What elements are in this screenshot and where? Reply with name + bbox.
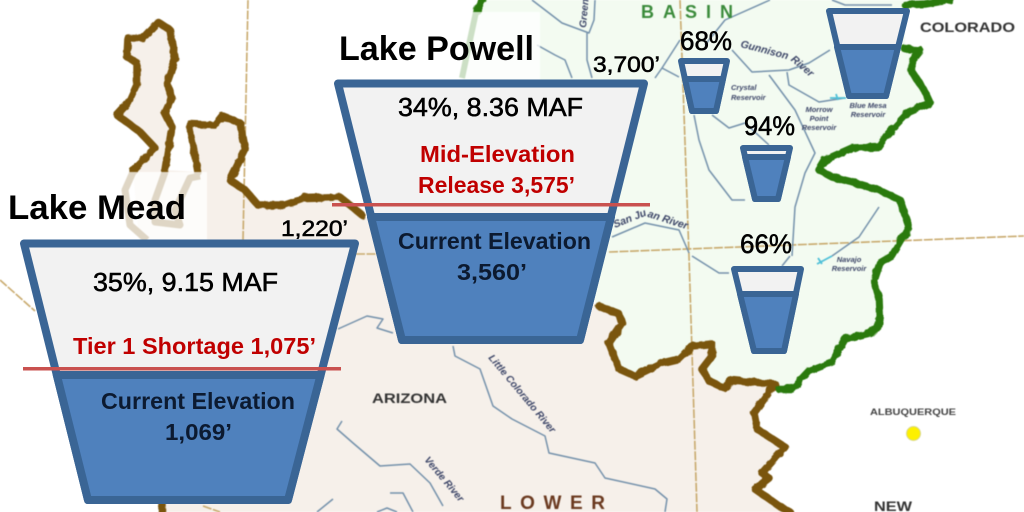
map label: COLORADO: COLORADO — [920, 19, 1015, 35]
green upper basin boundary — [476, 0, 949, 389]
current elevation value: 1,069’ — [165, 419, 232, 445]
shortage threshold label: Tier 1 Shortage 1,075’ — [73, 333, 316, 359]
cup body — [338, 84, 644, 340]
Lake Mead cup diagram — [23, 244, 355, 500]
river and reservoir labels: Reservoir — [851, 110, 886, 119]
river and reservoir labels: Point — [810, 114, 829, 123]
river and reservoir labels: Little Colorado River — [486, 353, 558, 436]
Crystal Reservoir percentage: 68% — [680, 26, 732, 56]
Crystal Reservoir cup — [681, 61, 727, 111]
water level — [371, 217, 611, 340]
Morrow Point Reservoir cup — [743, 148, 790, 199]
Lake Powell title: Lake Powell — [339, 30, 534, 68]
river and reservoir labels: San Juan River — [614, 210, 689, 229]
current elevation label: Current Elevation — [101, 388, 295, 414]
map label: BASIN: BASIN — [641, 2, 733, 22]
Lake Powell cup diagram — [332, 84, 650, 340]
brown lower basin boundary — [117, 22, 790, 512]
river and reservoir labels: Navajo — [837, 255, 862, 264]
Navajo Reservoir cup — [734, 269, 801, 351]
river and reservoir labels: Reservoir — [731, 93, 767, 102]
Navajo Reservoir percentage: 66% — [740, 229, 792, 259]
storage label: 34%, 8.36 MAF — [398, 94, 583, 122]
map label: ARIZONA: ARIZONA — [372, 391, 447, 406]
map label: ALBUQUERQUE: ALBUQUERQUE — [870, 407, 956, 418]
region: lower basin — [117, 22, 790, 512]
current elevation value: 3,560’ — [457, 259, 527, 285]
Lake Mead dam elevation: 1,220’ — [281, 216, 348, 241]
river and reservoir labels: Morrow — [805, 105, 834, 114]
faded overlay behind Lake Powell title — [400, 12, 540, 80]
release threshold line — [332, 203, 650, 206]
reservoirs in cyan — [817, 94, 846, 264]
river and reservoir labels: Reservoir — [832, 264, 867, 273]
river and reservoir labels: Crystal — [731, 83, 757, 92]
storage label: 35%, 9.15 MAF — [93, 269, 278, 297]
icon: Albuquerque city dot — [906, 426, 920, 440]
cup body — [24, 244, 355, 500]
water level — [57, 375, 321, 500]
region: upper basin — [462, 0, 949, 389]
faded overlay behind Lake Mead title — [0, 172, 207, 242]
river and reservoir labels — [422, 0, 902, 505]
Lake Powell dam elevation: 3,700’ — [593, 52, 660, 77]
river and reservoir labels: Blue Mesa — [849, 101, 887, 110]
rivers — [317, 0, 892, 512]
Lake Mead title: Lake Mead — [8, 189, 186, 227]
Morrow Point Reservoir percentage: 94% — [744, 111, 795, 141]
release threshold label: Release 3,575’ — [418, 172, 575, 198]
river and reservoir labels: Gunnison River — [740, 40, 815, 76]
Blue Mesa Reservoir cup — [829, 11, 907, 96]
river and reservoir labels: Reservoir — [802, 123, 837, 132]
shortage threshold line — [23, 367, 341, 370]
river and reservoir labels: Verde River — [422, 455, 466, 505]
current elevation label: Current Elevation — [398, 228, 591, 254]
release threshold label: Mid-Elevation — [420, 141, 575, 167]
